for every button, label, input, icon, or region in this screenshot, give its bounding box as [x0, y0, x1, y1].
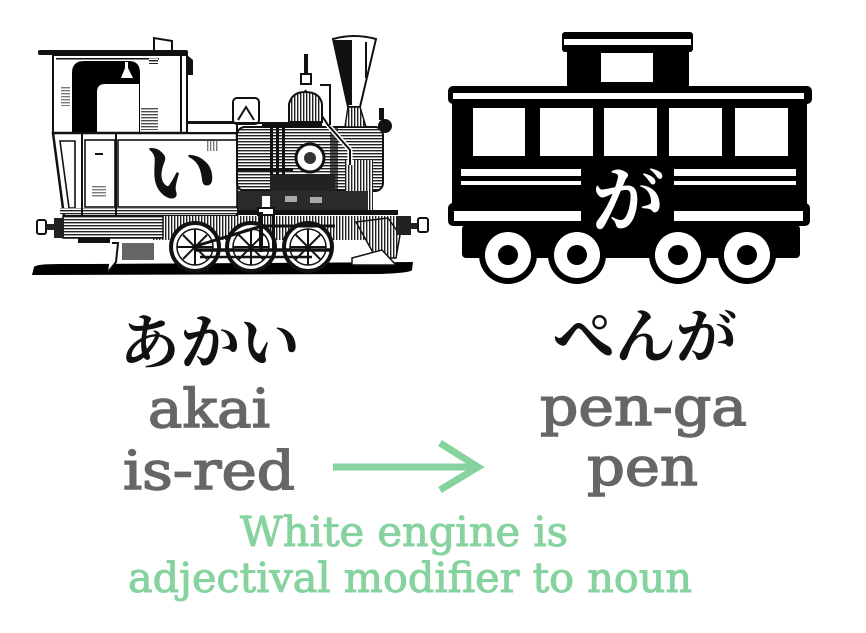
front coupler — [397, 216, 428, 235]
icon: black carriage — [448, 32, 812, 284]
gloss: is-red: is-red — [123, 441, 295, 502]
rail — [32, 262, 413, 275]
rear coupler — [37, 218, 64, 238]
romaji: akai: akai — [148, 379, 270, 440]
carriage roof — [448, 86, 812, 104]
romaji: pen-ga: pen-ga — [540, 377, 747, 438]
gloss: pen: pen — [587, 437, 698, 498]
japanese word: pen-ga: ぺんが — [553, 305, 737, 371]
carriage wheels — [479, 226, 776, 284]
kana on engine: い — [145, 135, 217, 215]
caption line 2: adjectival modifier to noun — [128, 554, 692, 602]
carriage stripes — [461, 169, 796, 185]
smokestack — [333, 36, 376, 127]
arrow — [333, 443, 478, 490]
caption line 1: White engine is — [240, 508, 568, 556]
carriage body — [452, 103, 807, 205]
cab upper — [53, 55, 187, 133]
running gear machinery — [63, 191, 400, 272]
cab roof — [38, 38, 193, 75]
steam dome and whistle — [289, 54, 330, 125]
carriage base band — [448, 203, 810, 258]
icon: steam locomotive engine — [32, 36, 428, 275]
boiler — [187, 90, 383, 210]
cab lower panels — [53, 133, 237, 216]
front dome lamp — [378, 108, 392, 133]
carriage clerestory — [562, 32, 693, 87]
carriage windows — [473, 108, 788, 156]
japanese word: akai: あかい — [120, 311, 300, 377]
sand box — [187, 98, 322, 126]
kana on carriage: が — [592, 162, 664, 242]
wheels — [171, 208, 335, 271]
